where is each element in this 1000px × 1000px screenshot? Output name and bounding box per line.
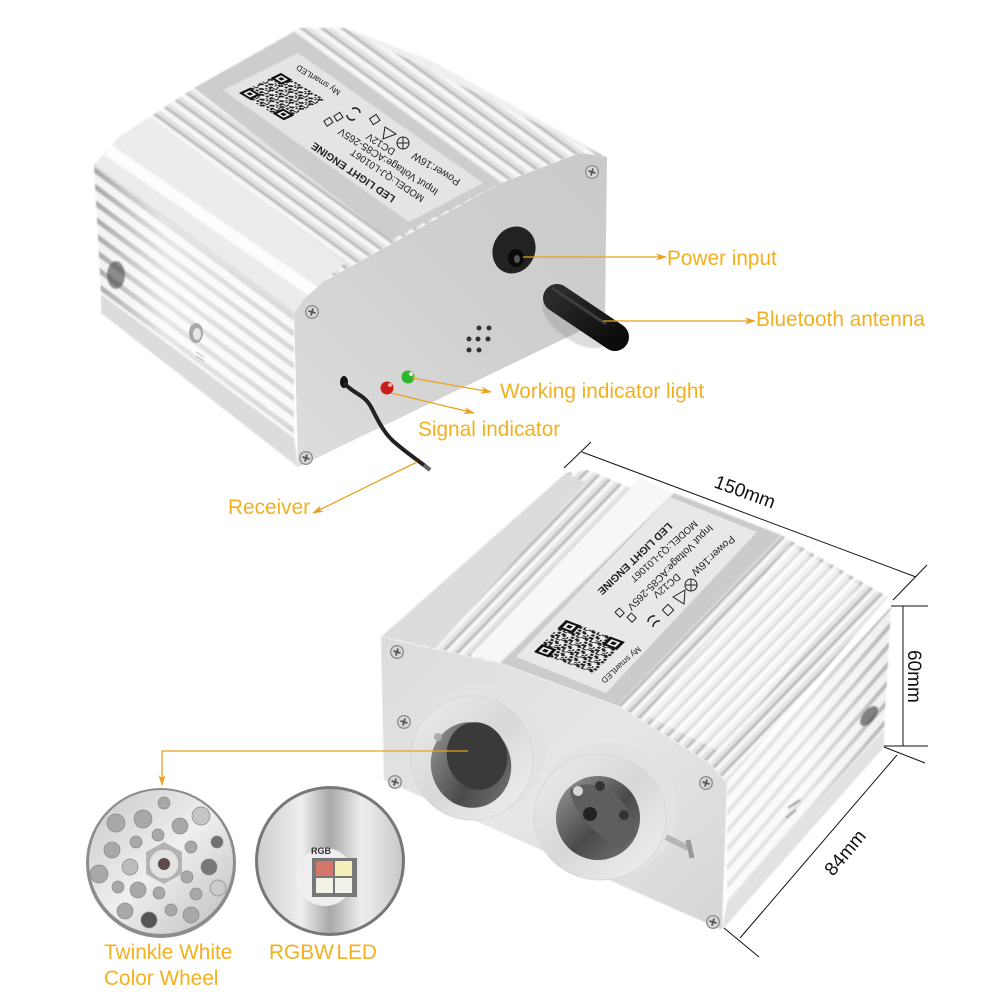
lens port: left ring: [411, 684, 546, 820]
icon: side screw: [189, 323, 204, 361]
label text: LED LIGHT ENGINE: [309, 139, 398, 204]
front panel: [381, 637, 727, 930]
callout: working indicator light: [412, 378, 704, 403]
hub: [146, 842, 182, 884]
callout: signal indicator: Signal indicator: [418, 418, 560, 441]
label text: LED LIGHT ENGINE: [595, 520, 674, 597]
dimension: 150mm: [564, 442, 927, 600]
dimension: 84mm: [724, 747, 925, 957]
label symbols: [324, 108, 409, 149]
LED chip: [312, 858, 357, 897]
top face with ribs: [381, 470, 888, 783]
label text: My smartLED: [294, 63, 342, 98]
product label: [516, 497, 757, 693]
screws: [299, 165, 599, 465]
label text: Input Voltage:AC85-265V: [337, 125, 441, 197]
label text: DC12V: [364, 130, 398, 157]
bluetooth antenna: [534, 285, 616, 359]
caption: twinkle white color wheel: Twinkle White: [104, 941, 232, 964]
screws: [388, 645, 720, 929]
callout: working indicator light: Working indicator light: [500, 380, 704, 403]
label symbols: [615, 579, 697, 627]
label text: Power:16W: [410, 149, 463, 188]
label text: [595, 518, 737, 686]
QR code: [239, 73, 326, 120]
label text: Input Voltage:AC85-265V: [625, 522, 715, 612]
lens port: right ring: [534, 743, 678, 880]
caption: twinkle white color wheel: Color Wheel: [104, 967, 218, 990]
caption: RGBW LED: RGBW LED: [269, 941, 377, 964]
speaker holes: [466, 326, 492, 352]
RGBW LED photo: [255, 786, 405, 936]
twinkle color wheel photo: [86, 788, 236, 938]
top face with ribs: [94, 28, 607, 313]
label text: MODEL:QJ-L0106T: [628, 518, 699, 584]
side fins: [722, 607, 891, 930]
wheel holes: [90, 797, 226, 928]
label text: Power:16W: [689, 533, 737, 578]
callout: power input: Power input: [667, 247, 777, 270]
callout: receiver: Receiver: [228, 496, 310, 519]
callout arrow to color wheel: [162, 751, 468, 785]
dimension: 150mm: 150mm: [711, 472, 778, 513]
dimension: 60mm: [884, 606, 928, 746]
dimension: 84mm: 84mm: [821, 826, 871, 880]
callout: signal indicator: [391, 393, 560, 441]
RGBW LED photo: RGB: [311, 846, 332, 856]
callout: bluetooth antenna: Bluetooth antenna: [756, 308, 925, 331]
product label: [223, 53, 483, 222]
receiver cable: [340, 376, 430, 470]
green working LED: [402, 370, 414, 384]
dimension: 60mm: 60mm: [903, 650, 924, 703]
front panel: [294, 153, 607, 467]
callout: receiver: [228, 462, 417, 519]
device: upper light engine, rear view: [94, 28, 616, 470]
QR code: [534, 620, 625, 674]
power input jack: [485, 219, 543, 281]
device: lower light engine, front view: [381, 470, 891, 930]
red signal LED: [380, 382, 394, 394]
side fins: [94, 165, 298, 467]
thumb screw: [666, 837, 692, 858]
label text: DC12V: [650, 571, 682, 600]
label text: My smartLED: [599, 645, 643, 686]
label text: MODEL:QJ-L0106T: [349, 146, 427, 204]
label text: [294, 63, 463, 204]
